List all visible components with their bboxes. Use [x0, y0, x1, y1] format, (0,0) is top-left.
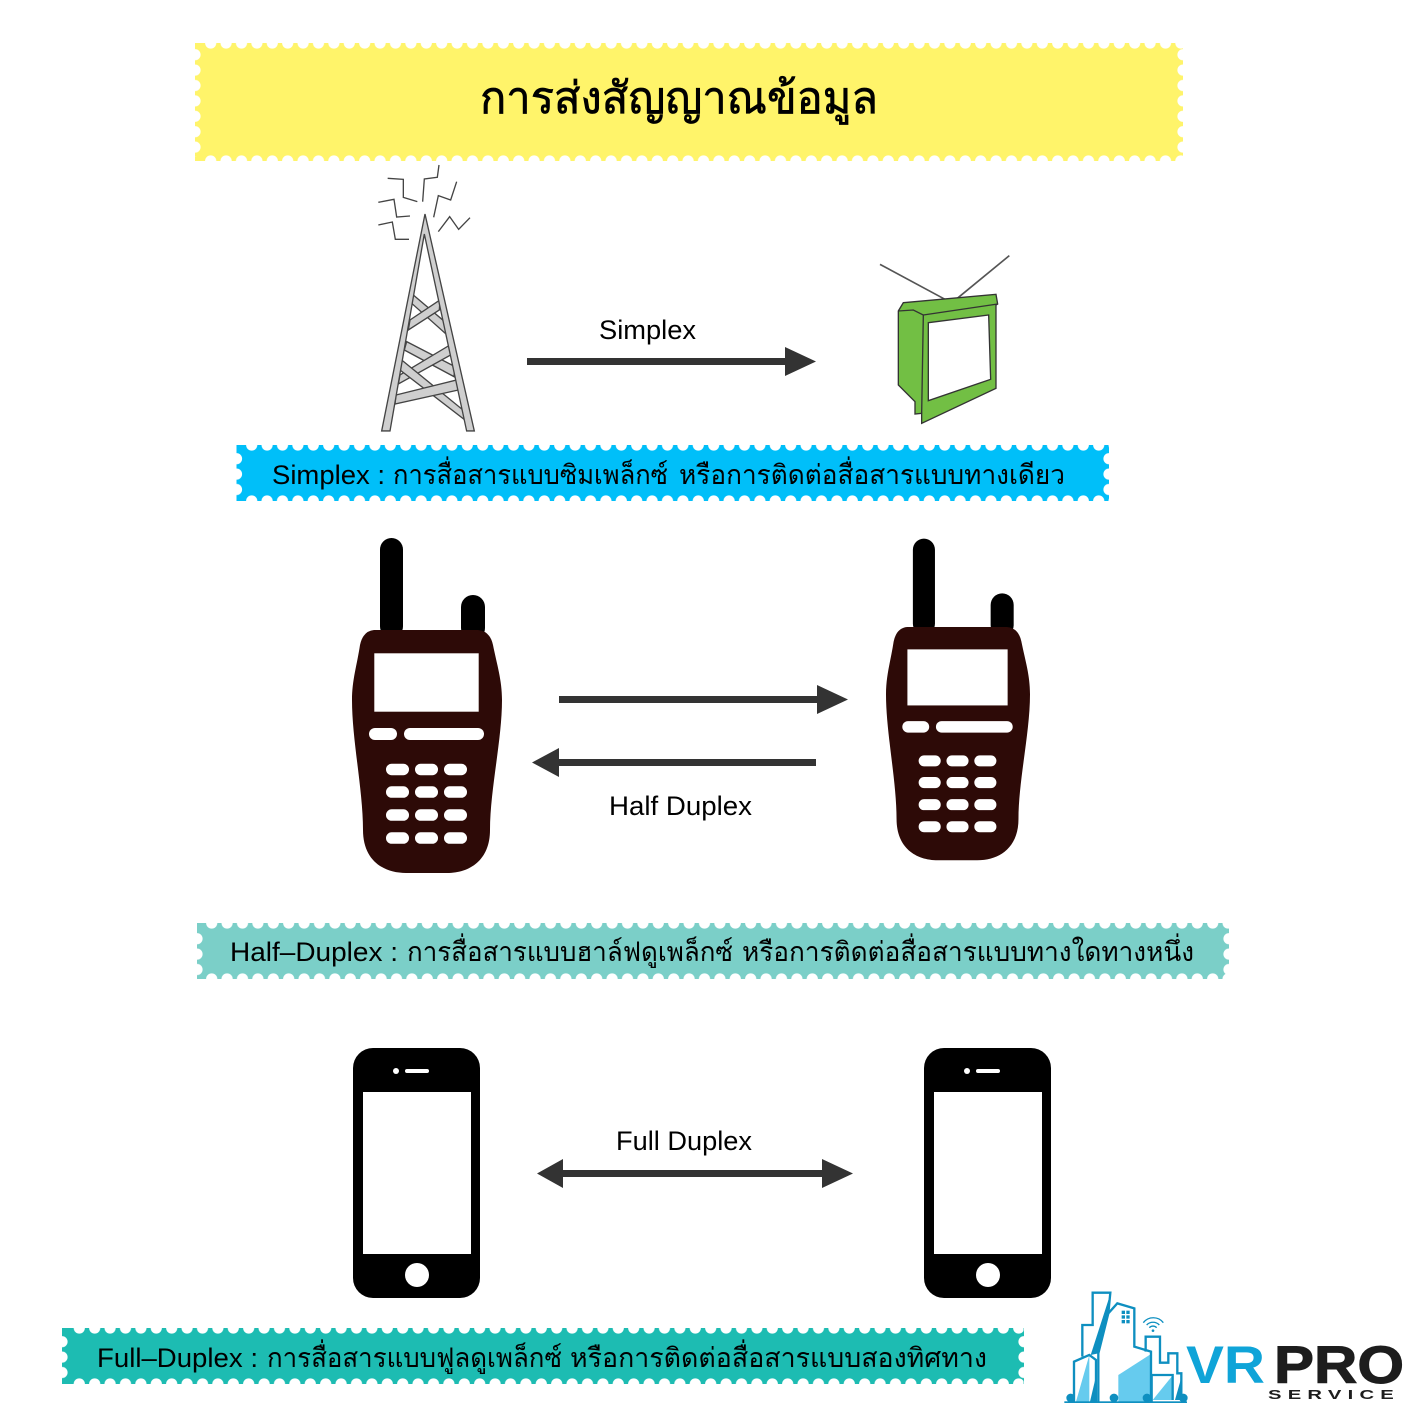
- logo: VRPRO Service: PRO: [1274, 1336, 1404, 1395]
- icon: smartphone left: [353, 1048, 480, 1298]
- icon: television: [880, 256, 1009, 423]
- arrow: simplex: [527, 347, 816, 376]
- full-duplex banner: หรือการติดต่อสื่อสารแบบสองทิศทาง: [570, 1339, 987, 1373]
- simplex banner: หรือการติดต่อสื่อสารแบบทางเดียว: [679, 456, 1065, 490]
- half-duplex banner: การสื่อสารแบบฮาล์ฟดูเพล็กซ์: [407, 933, 733, 968]
- full-duplex banner: [55, 1321, 1031, 1391]
- arrow: half duplex forward: [559, 685, 848, 714]
- simplex banner: การสื่อสารแบบซิมเพล็กซ์: [393, 456, 668, 490]
- arrow: half duplex back: [532, 748, 816, 777]
- logo: city skyline: [1064, 1293, 1188, 1403]
- label: Full Duplex: Full Duplex: [616, 1126, 752, 1156]
- half-duplex banner: หรือการติดต่อสื่อสารแบบทางใดทางหนึ่ง: [742, 933, 1194, 967]
- icon: smartphone right: [924, 1048, 1051, 1298]
- logo: VRPRO Service: [1064, 1293, 1404, 1403]
- title banner: การส่งสัญญาณข้อมูล: [480, 74, 878, 125]
- simplex banner: [230, 438, 1116, 508]
- icon: radio tower: [378, 165, 474, 431]
- logo: VRPRO Service: VR: [1186, 1336, 1265, 1395]
- arrow: full duplex: [537, 1159, 853, 1188]
- simplex banner: Simplex :: [272, 460, 385, 490]
- label: Simplex: Simplex: [599, 315, 697, 345]
- half-duplex banner: [190, 916, 1236, 986]
- title banner: [188, 36, 1190, 168]
- icon: walkie-talkie right: [886, 539, 1030, 860]
- full-duplex banner: การสื่อสารแบบฟูลดูเพล็กซ์: [267, 1339, 562, 1374]
- icon: walkie-talkie left: [352, 538, 502, 873]
- half-duplex banner: Half–Duplex :: [230, 937, 398, 967]
- logo: VRPRO Service: SERVICE: [1268, 1387, 1400, 1402]
- full-duplex banner: Full–Duplex :: [97, 1343, 258, 1373]
- label: Half Duplex: Half Duplex: [609, 791, 753, 821]
